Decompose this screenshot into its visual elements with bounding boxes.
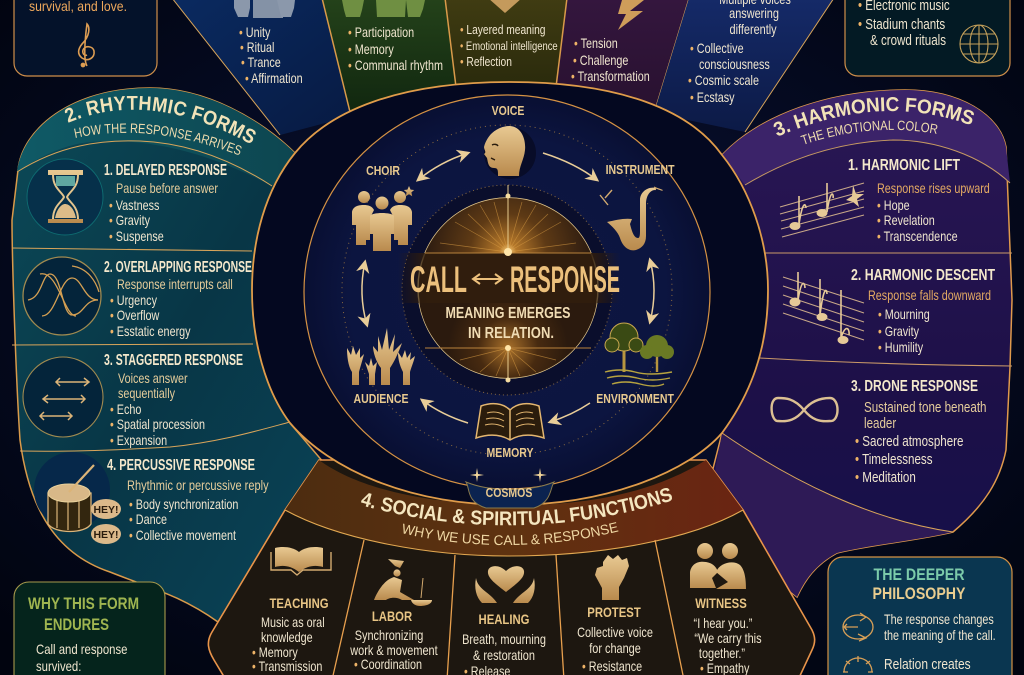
- node: audience: AUDIENCE: [354, 391, 409, 406]
- lower band: [706, 433, 953, 597]
- subheading: THE EMOTIONAL COLOR: [800, 120, 938, 144]
- row: harmonic descent: [783, 267, 995, 355]
- body text: survived:: [36, 658, 81, 674]
- title: call and response: RESPONSE: [510, 259, 620, 300]
- icon: descending staff: [783, 272, 864, 344]
- list: contemporary forms: [858, 0, 950, 48]
- row: harmonic descent: • Mourning: [878, 307, 930, 322]
- heading: [872, 565, 966, 603]
- node: cosmos: COSMOS: [486, 485, 532, 500]
- heading: THE DEEPER: [874, 565, 964, 584]
- row: drone: • Sacred atmosphere: [855, 433, 963, 449]
- panel: harmonic forms: [712, 89, 1013, 598]
- tagline: MEANING EMERGES: [446, 305, 571, 322]
- node: cosmos: [466, 468, 554, 508]
- node: environment: ENVIRONMENT: [596, 391, 675, 406]
- row: delayed: [27, 159, 227, 244]
- heading: PHILOSOPHY: [872, 584, 966, 603]
- icon: heart in hands: [475, 566, 535, 603]
- list: unity bullets: [239, 25, 303, 86]
- row: staggered: • Spatial procession: [110, 417, 205, 432]
- row: drone: 3. DRONE RESPONSE: [851, 378, 978, 395]
- list: layered bullets: • Emotional intelligence: [460, 40, 558, 53]
- list: unity bullets: • Trance: [241, 55, 281, 70]
- header band: [285, 460, 743, 556]
- icon: hourglass: [27, 159, 103, 235]
- row: delayed: 1. DELAYED RESPONSE: [104, 162, 227, 179]
- column: teaching: [252, 547, 331, 674]
- body text: [36, 641, 127, 674]
- heading: 4. SOCIAL & SPIRITUAL FUNCTIONS: [361, 488, 672, 526]
- body text: Call and response: [36, 641, 127, 657]
- tagline: [446, 305, 571, 342]
- icon: treble clef: [79, 24, 94, 67]
- icon: radial dial: [843, 656, 873, 672]
- row: percussive: • Dance: [129, 512, 167, 527]
- node: environment: [596, 323, 675, 406]
- panel: top wedge layered meaning: [445, 0, 567, 87]
- text: response changes: the meaning of the call.: [884, 628, 996, 643]
- icon: embracing figures: [690, 543, 746, 589]
- row: staggered: Voices answer: [118, 371, 188, 386]
- column: teaching: • Transmission: [252, 659, 322, 674]
- header band: [722, 90, 1010, 185]
- row: staggered: 3. STAGGERED RESPONSE: [104, 352, 243, 369]
- column: healing: [462, 566, 546, 675]
- icon: green figures: [342, 0, 425, 17]
- column: teaching: knowledge: [261, 630, 313, 645]
- panel: rhythmic forms: [11, 87, 322, 622]
- node: instrument: INSTRUMENT: [606, 162, 675, 177]
- tagline: IN RELATION.: [468, 325, 554, 342]
- row: delayed: Pause before answer: [116, 181, 218, 196]
- row: drone: • Meditation: [855, 469, 916, 485]
- icon: rising staff: [780, 183, 864, 237]
- list: contemporary forms: • Stadium chants: [858, 16, 946, 32]
- list: layered bullets: • Layered meaning: [460, 24, 545, 37]
- list: tension bullets: • Tension: [574, 36, 618, 51]
- row: harmonic lift: Response rises upward: [877, 181, 990, 196]
- subheading: HOW THE RESPONSE ARRIVES: [74, 124, 242, 155]
- list: unity bullets: • Affirmation: [245, 71, 303, 86]
- heading: ENDURES: [44, 615, 109, 634]
- node: memory: [476, 404, 544, 460]
- list: tension bullets: • Transformation: [571, 69, 650, 84]
- row: staggered: sequentially: [118, 386, 176, 401]
- list: participation bullets: • Memory: [348, 42, 395, 57]
- icon: infinity: [772, 398, 838, 421]
- node arrows: [362, 153, 654, 423]
- panel: top wedge participation: [322, 0, 456, 116]
- row: delayed: • Vastness: [109, 198, 159, 213]
- node: choir: [352, 163, 414, 251]
- icon: saxophone: [600, 187, 662, 250]
- icon: open book: [476, 404, 544, 440]
- panel: social and spiritual functions: [208, 459, 816, 675]
- panel: why this form endures: [14, 582, 165, 675]
- column: healing: HEALING: [479, 611, 530, 627]
- subheading: WHY WE USE CALL & RESPONSE: [403, 522, 618, 546]
- row: drone: Sustained tone beneath: [864, 399, 987, 415]
- icon: singing head: [484, 126, 536, 179]
- row: overlapping: • Overflow: [110, 308, 160, 323]
- row: overlapping: [23, 257, 252, 339]
- list: layered bullets: • Reflection: [460, 56, 512, 69]
- node: voice: VOICE: [492, 103, 524, 118]
- row: delayed: • Suspense: [109, 229, 164, 244]
- column: teaching: • Memory: [252, 645, 299, 660]
- column: healing: & restoration: [473, 648, 535, 663]
- panel: central oval: [252, 82, 768, 508]
- row: percussive: • Body synchronization: [129, 497, 238, 512]
- column: teaching: Music as oral: [261, 615, 325, 630]
- heading: [28, 594, 139, 634]
- heading: 2. RHYTHMIC FORMS: [64, 96, 256, 143]
- panel: the deeper philosophy: [828, 557, 1012, 675]
- icon: drum and hey bubbles: HEY!: [93, 529, 119, 541]
- icon: raised fist: [595, 555, 629, 600]
- column: protest: PROTEST: [587, 604, 641, 620]
- node: memory: MEMORY: [487, 445, 534, 460]
- row: harmonic lift: • Revelation: [877, 213, 935, 228]
- row: harmonic lift: • Hope: [877, 198, 910, 213]
- title: call and response: [410, 259, 620, 300]
- row: harmonic lift: • Transcendence: [877, 229, 958, 244]
- list: layered bullets: [460, 24, 558, 69]
- text: response changes: The response changes: [884, 612, 994, 627]
- icon: staggered arrows: [23, 357, 103, 437]
- column: healing: Breath, mourning: [462, 632, 546, 647]
- node: voice: [484, 103, 536, 179]
- row: drone: [772, 378, 987, 485]
- column: protest: • Resistance: [582, 659, 642, 674]
- list: cosmic bullets: consciousness: [699, 57, 770, 72]
- icon: heart tip: [488, 0, 522, 13]
- list: participation bullets: • Participation: [348, 25, 414, 40]
- row: harmonic lift: [780, 157, 990, 244]
- column: witness: WITNESS: [695, 595, 747, 611]
- icon: lightning bolt: [618, 0, 644, 30]
- list: tension bullets: • Challenge: [573, 53, 629, 68]
- column: witness: “We carry this: [694, 631, 762, 646]
- icon: gathered figures: [234, 0, 295, 18]
- row: overlapping: • Esstatic energy: [110, 324, 191, 339]
- row: percussive: Rhythmic or percussive reply: [127, 478, 269, 493]
- row: staggered: [23, 352, 243, 448]
- column: witness: together.”: [699, 646, 745, 661]
- row: percussive: [34, 452, 269, 544]
- icon: trees and water: [605, 323, 674, 386]
- column: witness: “I hear you.”: [694, 616, 752, 631]
- node: audience: [347, 328, 415, 406]
- row: harmonic descent: Response falls downward: [868, 288, 991, 303]
- row: drone: leader: [864, 415, 897, 431]
- list: unity bullets: • Unity: [239, 25, 271, 40]
- title: call and response: CALL: [410, 259, 467, 300]
- list: participation bullets: [348, 25, 443, 73]
- column: protest: Collective voice: [577, 625, 653, 640]
- row: percussive: • Collective movement: [129, 528, 237, 543]
- icon: cycle arrows: [843, 613, 873, 641]
- list: cosmic bullets: • Ecstasy: [690, 90, 735, 105]
- panel: top wedge tension: [556, 0, 689, 113]
- row: harmonic lift: 1. HARMONIC LIFT: [848, 157, 960, 174]
- centre circle: [398, 185, 620, 382]
- icon: globe: [960, 25, 998, 63]
- row: harmonic descent: • Humility: [878, 340, 924, 355]
- list: unity bullets: • Ritual: [240, 40, 274, 55]
- list: cosmic bullets: [688, 41, 770, 105]
- row: overlapping: Response interrupts call: [117, 277, 233, 292]
- node: choir: CHOIR: [366, 163, 400, 178]
- icon: raised hands: [347, 328, 415, 385]
- icon: laborer: [374, 559, 432, 606]
- list: contemporary forms: & crowd rituals: [870, 32, 946, 48]
- column: witness: [690, 543, 762, 675]
- list: cosmic bullets: • Collective: [690, 41, 744, 56]
- column: teaching: TEACHING: [269, 595, 329, 611]
- header band: [17, 88, 297, 186]
- list: participation bullets: • Communal rhythm: [348, 58, 443, 73]
- column: labor: [349, 559, 438, 672]
- list: cosmic bullets: • Cosmic scale: [688, 73, 759, 88]
- panel: top wedge unity: [172, 0, 352, 135]
- column: protest: [577, 555, 653, 674]
- column: protest: for change: [589, 641, 641, 656]
- column: labor: Synchronizing: [355, 628, 423, 643]
- icon: open book: [271, 547, 331, 575]
- row: staggered: • Expansion: [110, 433, 167, 448]
- row: harmonic descent: • Gravity: [878, 324, 920, 339]
- row: percussive: 4. PERCUSSIVE RESPONSE: [107, 457, 255, 474]
- panel: top left note: [14, 0, 157, 76]
- row: drone: • Timelessness: [855, 451, 933, 467]
- list: tension bullets: [571, 36, 650, 84]
- row: staggered: • Echo: [110, 402, 142, 417]
- heading: 3. HARMONIC FORMS: [774, 97, 974, 136]
- icon: drum and hey bubbles: HEY!: [93, 504, 119, 516]
- arrow: call to response: [473, 274, 502, 284]
- text: relation creates: Relation creates: [884, 656, 971, 672]
- panel: top wedge cosmic: [654, 0, 834, 132]
- row: delayed: • Gravity: [109, 213, 151, 228]
- column: labor: work & movement: [349, 643, 438, 658]
- icon: choir people: [352, 186, 414, 251]
- column: labor: LABOR: [372, 608, 412, 624]
- icon: drum and hey bubbles: [34, 452, 121, 544]
- text: multiple voices: differently: [730, 22, 777, 37]
- text: multiple voices: [719, 0, 791, 37]
- icon: overlapping waves: [23, 257, 101, 335]
- text: response changes: [884, 612, 996, 643]
- row: overlapping: • Urgency: [110, 293, 158, 308]
- panel: top right note: [845, 0, 1010, 76]
- heading: WHY THIS FORM: [28, 594, 139, 613]
- text: multiple voices: answering: [729, 6, 779, 21]
- row: overlapping: 2. OVERLAPPING RESPONSE: [104, 259, 252, 276]
- column: labor: • Coordination: [354, 657, 422, 672]
- node: instrument: [600, 162, 675, 250]
